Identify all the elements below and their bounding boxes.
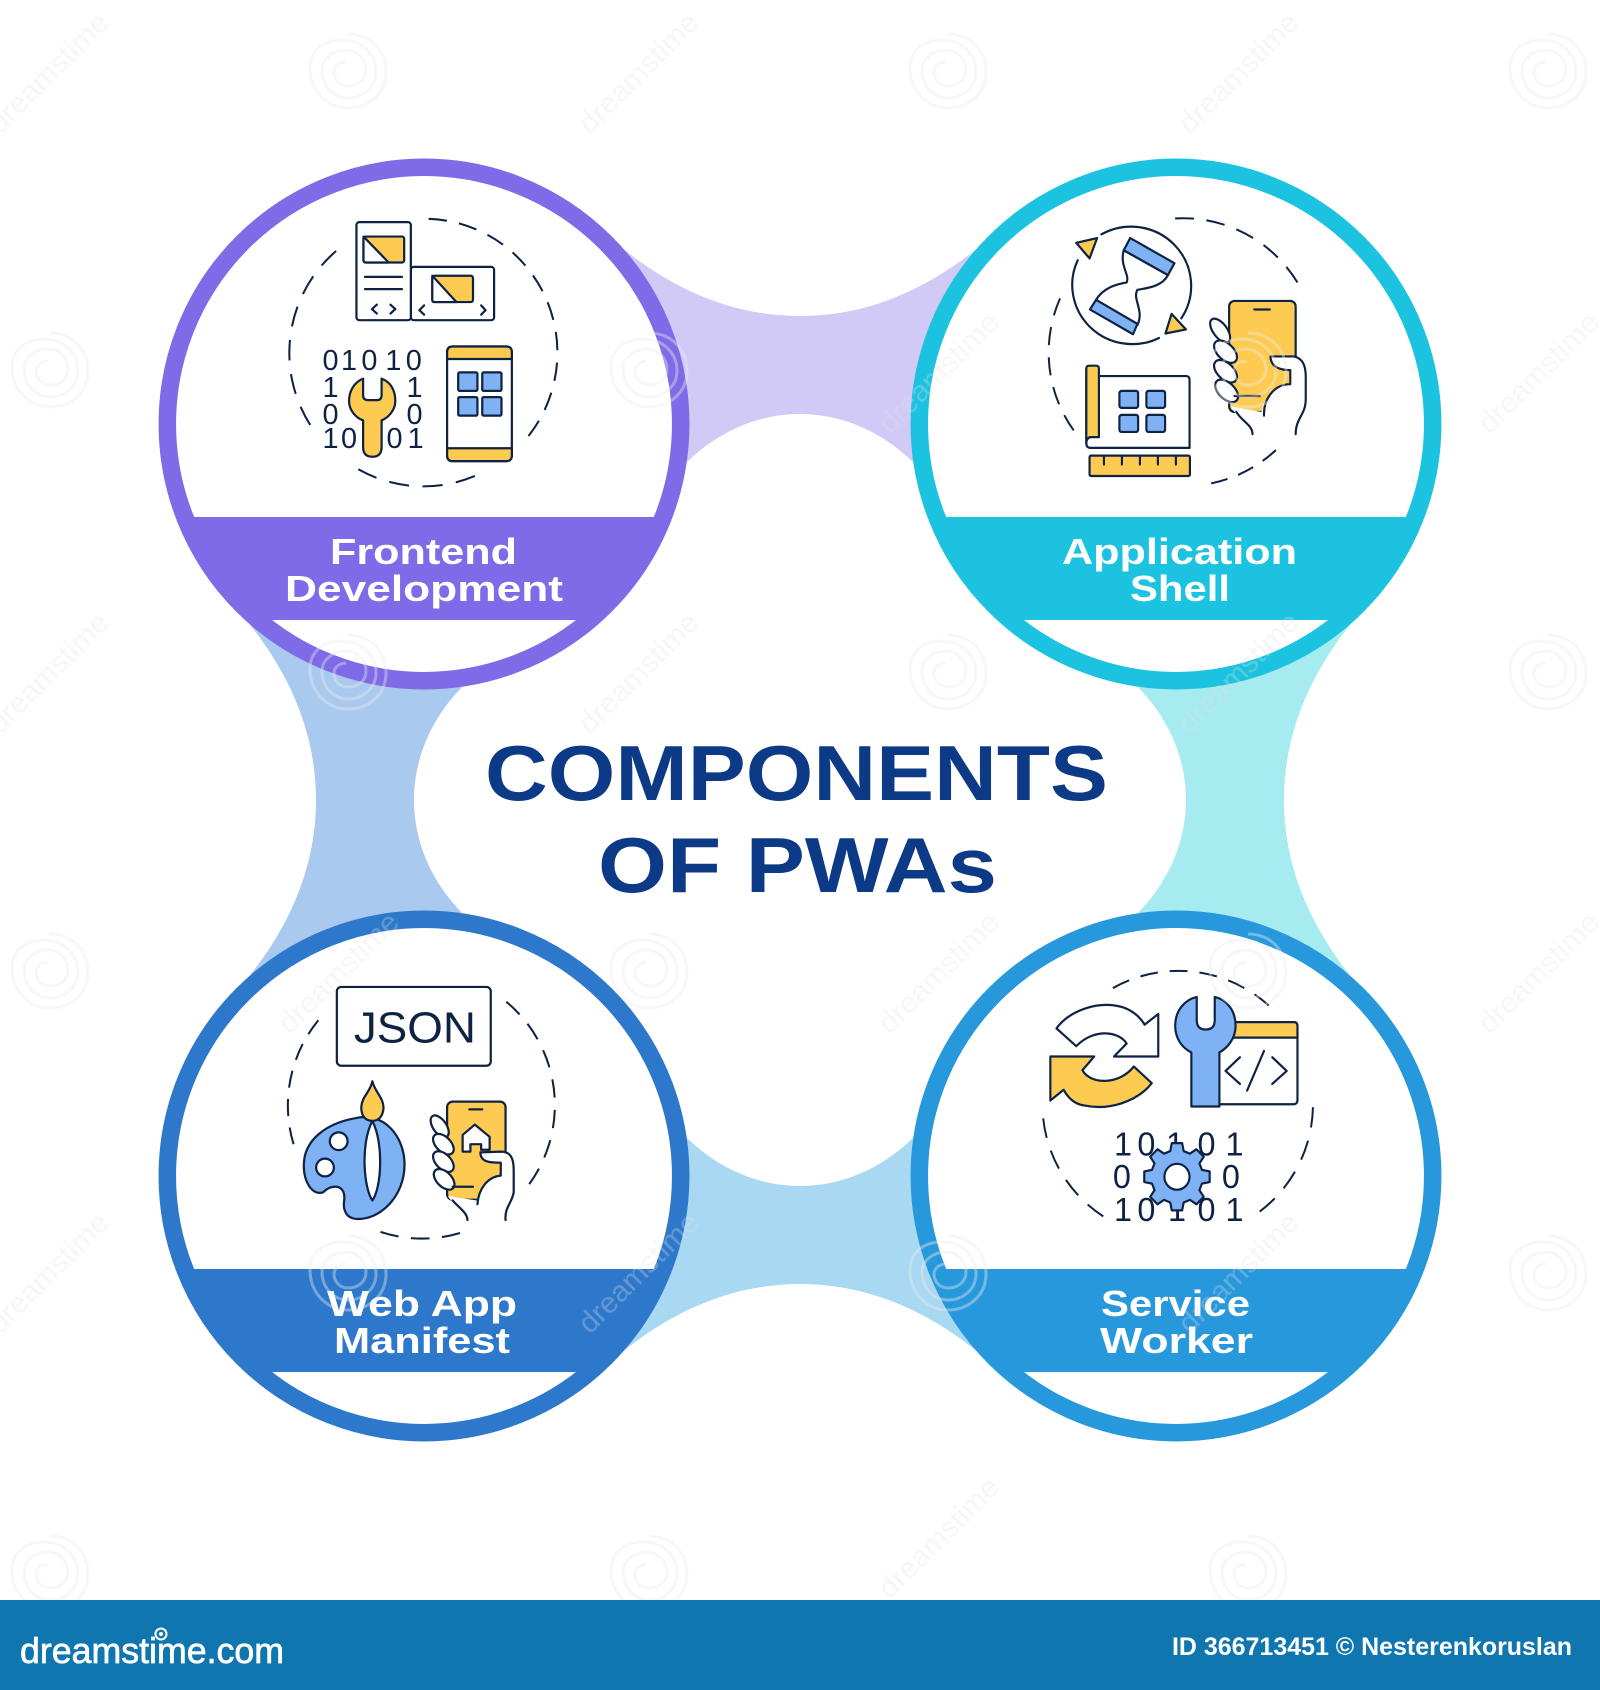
ring (167, 919, 681, 1433)
label text (1100, 1283, 1253, 1361)
footer bar (0, 1600, 1600, 1690)
watermark text: dreamstime (1172, 6, 1306, 140)
connector: bottom sky blue (621, 1138, 979, 1353)
label text (285, 531, 563, 609)
icon: frontend tools: 00 (323, 399, 423, 431)
icon: service worker (1043, 971, 1313, 1228)
watermark text: dreamstime (572, 6, 706, 140)
title: OF PWAs (598, 821, 997, 909)
panel: Frontend Development (167, 167, 681, 681)
watermark text: dreamstime (872, 906, 1006, 1040)
icon: manifest: JSON (354, 1003, 476, 1052)
icon: frontend tools (289, 219, 557, 486)
panel: Web App Manifest (167, 919, 681, 1433)
icon: service worker: 00 (1113, 1157, 1240, 1195)
label text: Frontend (330, 531, 517, 572)
label text (327, 1283, 517, 1361)
title: COMPONENTS (485, 729, 1108, 817)
footer logo: dreamstime.com (20, 1630, 284, 1671)
icon: service worker: 10101 (1114, 1191, 1244, 1228)
watermark text: dreamstime (872, 306, 1006, 440)
panel: Application Shell (919, 167, 1433, 681)
icon: app shell (1049, 218, 1306, 483)
connector: top purple (621, 247, 979, 462)
title (485, 729, 1108, 909)
watermark text: dreamstime (572, 1206, 706, 1340)
label text (1062, 531, 1297, 609)
ring (919, 167, 1433, 681)
connector: right teal (1138, 621, 1353, 979)
ring (167, 167, 681, 681)
panel: Service Worker (919, 919, 1433, 1433)
ring (919, 919, 1433, 1433)
label text: Development (285, 568, 563, 609)
label band (190, 517, 658, 620)
icon: manifest (288, 987, 555, 1239)
icon: frontend tools: 11 (323, 372, 423, 404)
label text: Application (1062, 531, 1297, 572)
label text: Shell (1130, 568, 1230, 609)
watermark text: dreamstime (1172, 1206, 1306, 1340)
connector: left blue (247, 621, 462, 979)
watermark text: dreamstime (1172, 606, 1306, 740)
label text: Service (1101, 1283, 1250, 1324)
footer credit: ID 366713451 © Nesterenkoruslan (1172, 1633, 1572, 1661)
label text: Worker (1100, 1320, 1253, 1361)
watermark text: dreamstime (272, 906, 406, 1040)
label text: Web App (327, 1283, 517, 1324)
watermark text: dreamstime (872, 1471, 1006, 1605)
label band (942, 517, 1410, 620)
watermark text: dreamstime (572, 606, 706, 740)
icon: frontend tools: 1001 (323, 423, 424, 455)
icon: frontend tools: 01010 (323, 345, 422, 377)
icon: service worker: 10101 (1114, 1125, 1244, 1162)
label band (190, 1269, 658, 1372)
label band (942, 1269, 1410, 1372)
label text: Manifest (334, 1320, 510, 1361)
